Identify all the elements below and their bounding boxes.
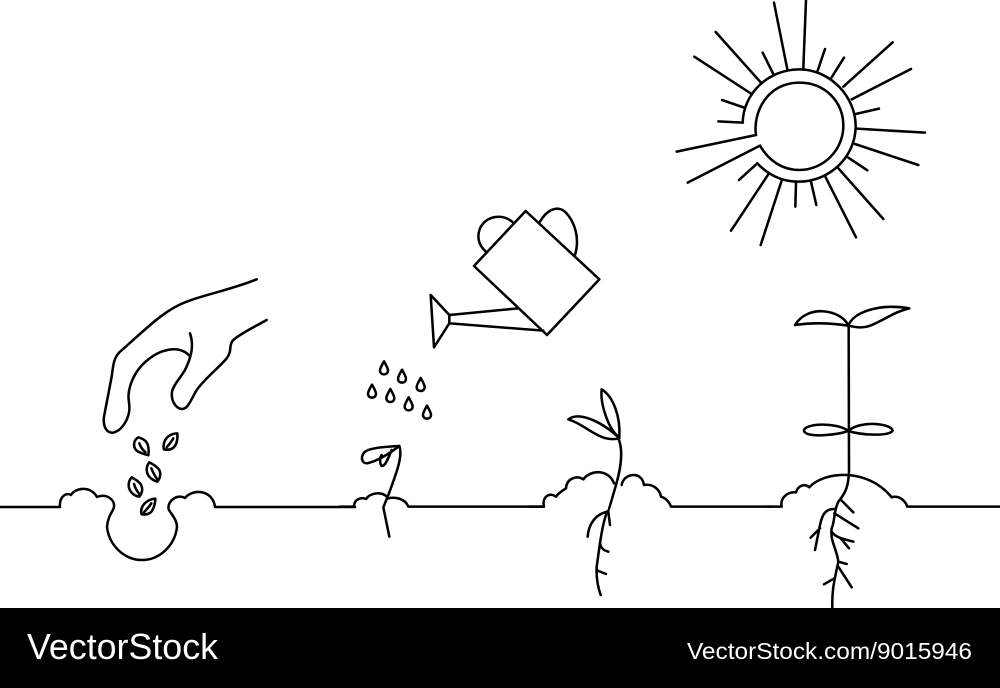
footer bar <box>0 608 1000 688</box>
soil with planting hole <box>0 489 355 560</box>
icon: watering can <box>431 209 599 347</box>
water drops <box>368 361 431 419</box>
footer url text: VectorStock.com/9015946 <box>687 638 972 664</box>
icon: hand <box>104 279 267 433</box>
footer logo text: VectorStock <box>27 626 219 667</box>
icon: sun <box>677 0 925 245</box>
seedling: sprout <box>362 446 400 537</box>
ground line <box>340 493 543 507</box>
seeds <box>129 433 177 515</box>
seedling: tall plant with roots <box>767 307 1000 608</box>
seedling: young plant with roots <box>530 389 772 595</box>
